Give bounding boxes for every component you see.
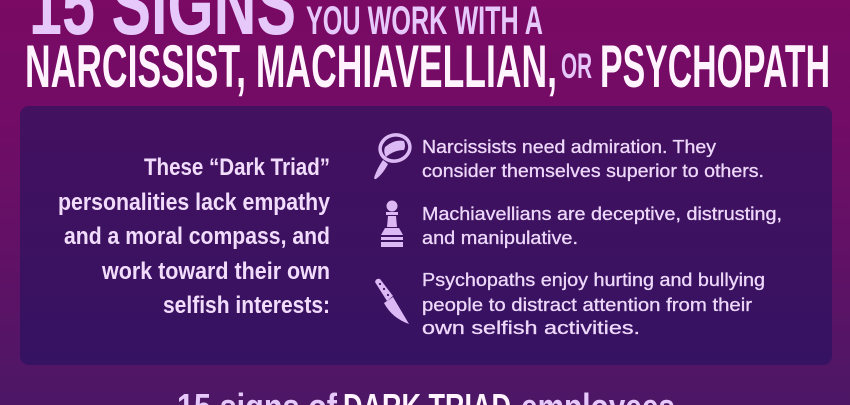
narcissists description xyxy=(422,136,764,181)
machiavellians description xyxy=(422,203,782,248)
narcissists description: Narcissists need admiration. They xyxy=(422,136,717,157)
intro text block: personalities lack empathy xyxy=(58,189,331,216)
icon: hand mirror xyxy=(374,132,413,179)
title line 2: or: OR xyxy=(561,47,592,86)
psychopaths description: own selfish activities. xyxy=(422,317,640,338)
psychopaths description: Psychopaths enjoy hurting and bullying xyxy=(422,269,765,290)
machiavellians description: and manipulative. xyxy=(422,227,578,248)
intro text block: work toward their own xyxy=(101,258,330,285)
narcissists description: consider themselves superior to others. xyxy=(422,160,764,181)
panel: dark triad description xyxy=(20,106,832,365)
intro text block xyxy=(58,154,331,319)
intro text block: and a moral compass, and xyxy=(64,223,330,250)
intro text block: selfish interests: xyxy=(163,292,330,319)
subheading: 15 signs of dark triad employees xyxy=(177,386,675,405)
icon: chess pawn xyxy=(381,200,403,247)
title xyxy=(25,0,830,100)
psychopaths description: people to distract attention from their xyxy=(422,294,752,315)
machiavellians description: Machiavellians are deceptive, distrusting, xyxy=(422,203,782,224)
psychopaths description xyxy=(422,269,765,338)
title line 1: you work with a: YOU WORK WITH A xyxy=(306,0,543,43)
icon: knife xyxy=(375,279,409,324)
intro text block: These “Dark Triad” xyxy=(144,154,330,181)
